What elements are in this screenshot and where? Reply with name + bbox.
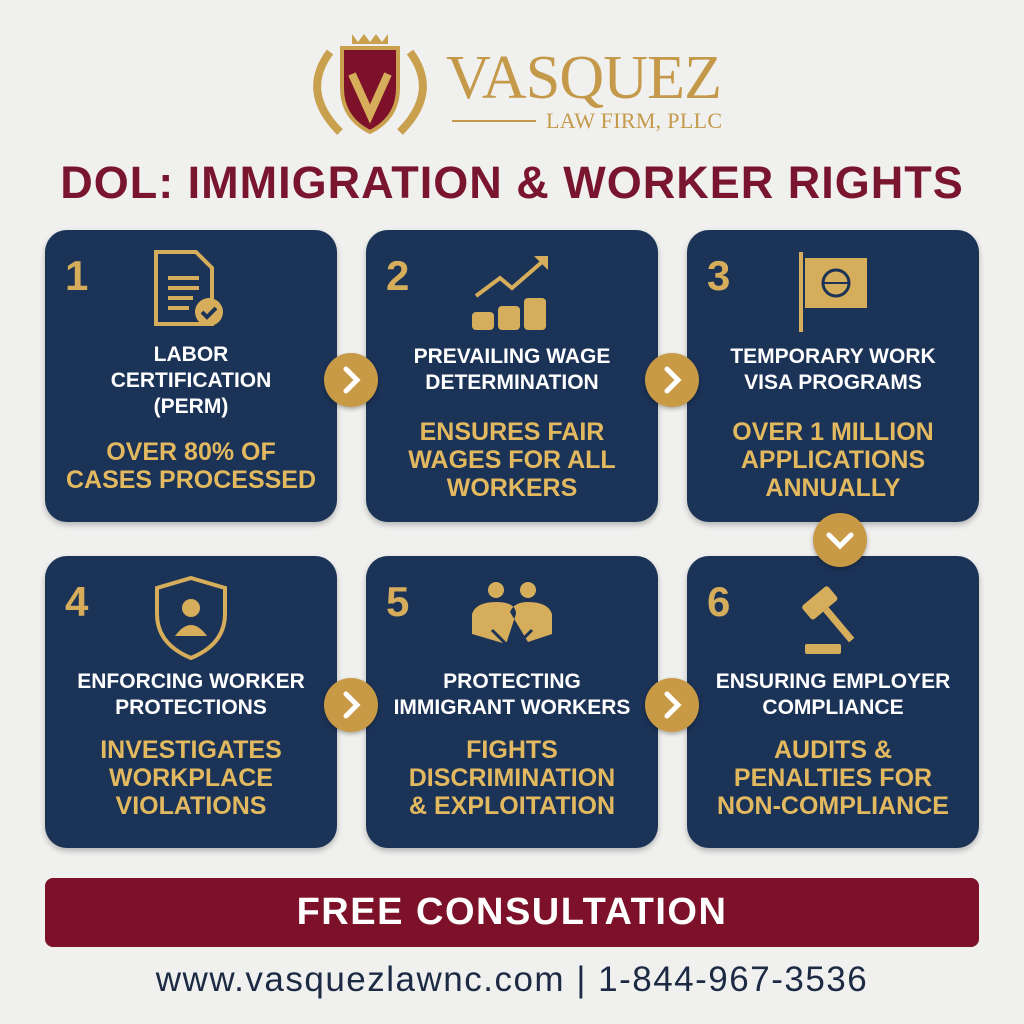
panel: 6 employer compliance: AUDITS & bbox=[774, 736, 892, 764]
icon: flag globe bbox=[799, 252, 867, 332]
panel: 1 labor certification: OVER 80% OF bbox=[106, 438, 276, 466]
panel: 3 temporary visa: APPLICATIONS bbox=[741, 446, 925, 474]
panel: 2 prevailing wage: WORKERS bbox=[447, 474, 577, 502]
banner: free consultation bbox=[45, 878, 979, 947]
panel: 5 protecting: DISCRIMINATION bbox=[409, 764, 615, 792]
panel: 6 employer compliance: COMPLIANCE bbox=[762, 696, 904, 719]
arrow 3-6 down bbox=[813, 513, 867, 567]
panel: 3 temporary visa bbox=[687, 230, 979, 522]
icon: shield person bbox=[155, 576, 227, 660]
panel: 5 protecting: PROTECTING bbox=[443, 670, 581, 693]
panel: 6 employer compliance: NON-COMPLIANCE bbox=[717, 792, 949, 820]
panel: 2 prevailing wage bbox=[366, 230, 658, 522]
panel: 4 enforcing bbox=[45, 556, 337, 848]
panel: 6 employer compliance: 6 bbox=[707, 578, 730, 625]
icon: laurel crest bbox=[317, 34, 423, 132]
panel: 1 labor certification: CASES PROCESSED bbox=[66, 466, 316, 494]
panel: 3 temporary visa: VISA PROGRAMS bbox=[744, 371, 922, 394]
icon: handshake bbox=[472, 582, 552, 644]
icon: gavel bbox=[802, 586, 854, 654]
panel: 1 labor certification: CERTIFICATION bbox=[111, 369, 271, 392]
logo: LAW FIRM, PLLC bbox=[546, 108, 722, 133]
panel: 1 labor certification: 1 bbox=[65, 252, 88, 299]
icon: coins chart bbox=[472, 256, 548, 330]
panel: 6 employer compliance bbox=[687, 556, 979, 848]
panel: 4 enforcing: INVESTIGATES bbox=[100, 736, 282, 764]
title: DOL: IMMIGRATION & WORKER RIGHTS bbox=[60, 157, 964, 208]
panel: 5 protecting bbox=[366, 556, 658, 848]
panel: 4 enforcing: 4 bbox=[65, 578, 88, 625]
panel: 1 labor certification: LABOR bbox=[154, 343, 228, 366]
arrow 2-3 bbox=[645, 353, 699, 407]
panel: 6 employer compliance: PENALTIES FOR bbox=[734, 764, 932, 792]
panel: 2 prevailing wage: DETERMINATION bbox=[425, 371, 599, 394]
panel: 2 prevailing wage: ENSURES FAIR bbox=[420, 418, 604, 446]
panel: 3 temporary visa: TEMPORARY WORK bbox=[730, 345, 936, 368]
banner: free consultation: FREE CONSULTATION bbox=[297, 891, 727, 933]
panel: 2 prevailing wage: WAGES FOR ALL bbox=[408, 446, 616, 474]
panel: 5 protecting: 5 bbox=[386, 578, 409, 625]
panel: 4 enforcing: PROTECTIONS bbox=[115, 696, 267, 719]
logo bbox=[313, 34, 722, 135]
brand name: VASQUEZ bbox=[446, 44, 722, 112]
panel: 2 prevailing wage: PREVAILING WAGE bbox=[414, 345, 610, 368]
panel: 1 labor certification: (PERM) bbox=[154, 395, 228, 418]
panel: 3 temporary visa: ANNUALLY bbox=[765, 474, 901, 502]
panel: 4 enforcing: WORKPLACE bbox=[109, 764, 273, 792]
arrow 4-5 bbox=[324, 678, 378, 732]
panel: 2 prevailing wage: 2 bbox=[386, 252, 409, 299]
panel: 3 temporary visa: 3 bbox=[707, 252, 730, 299]
panel: 5 protecting: IMMIGRANT WORKERS bbox=[394, 696, 630, 719]
arrow 5-6 bbox=[645, 678, 699, 732]
arrow 1-2 bbox=[324, 353, 378, 407]
contact line: www.vasquezlawnc.com | 1-844-967-3536 bbox=[156, 960, 868, 999]
panel: 5 protecting: FIGHTS bbox=[466, 736, 558, 764]
icon: document check bbox=[154, 250, 223, 326]
panel: 4 enforcing: VIOLATIONS bbox=[116, 792, 266, 820]
panel: 1 labor certification bbox=[45, 230, 337, 522]
panel: 6 employer compliance: ENSURING EMPLOYER bbox=[716, 670, 950, 693]
panel: 4 enforcing: ENFORCING WORKER bbox=[77, 670, 305, 693]
panel: 3 temporary visa: OVER 1 MILLION bbox=[732, 418, 934, 446]
panel: 5 protecting: & EXPLOITATION bbox=[409, 792, 615, 820]
